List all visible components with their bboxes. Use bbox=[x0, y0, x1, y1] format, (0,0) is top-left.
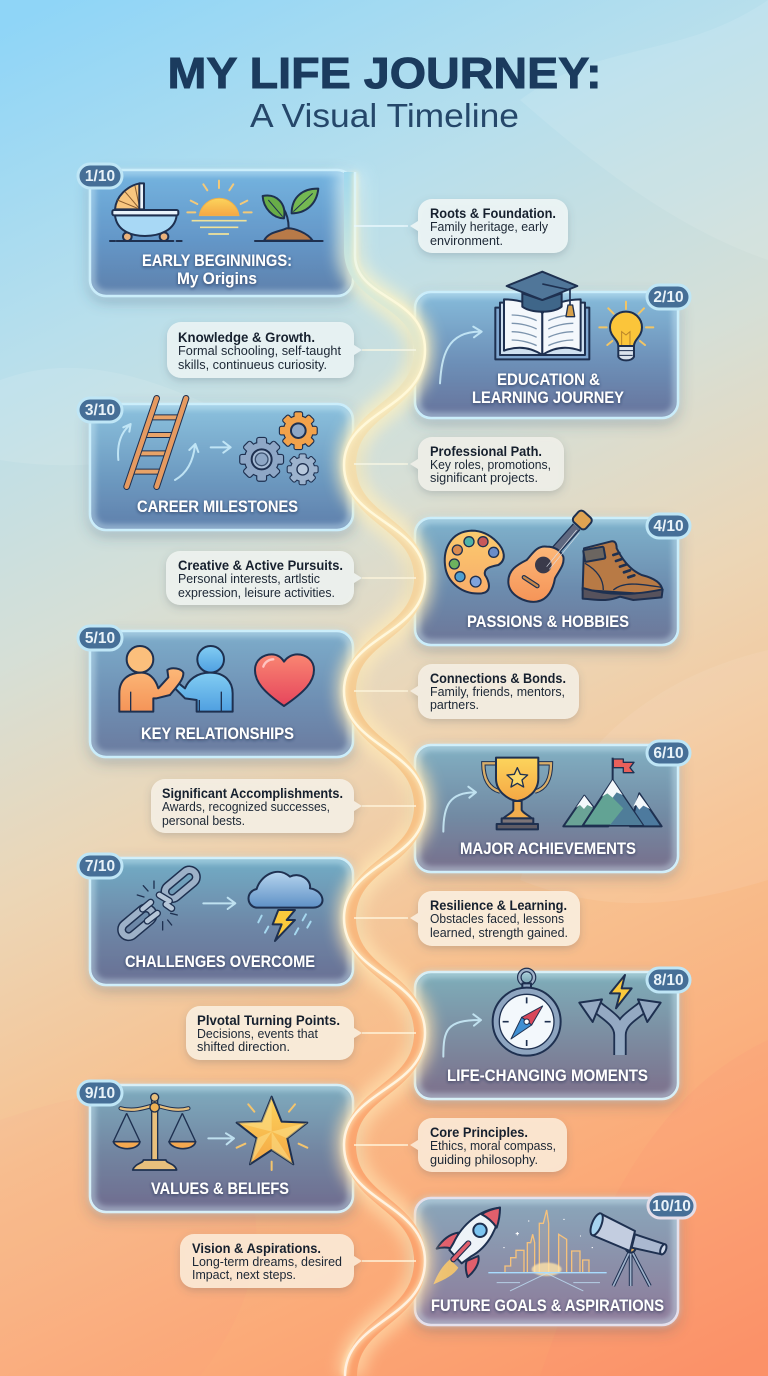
callout: significant accomplishments: Awards, recognized successes, bbox=[162, 800, 330, 814]
badge 3/10: 3/10 bbox=[85, 402, 115, 419]
callout: resilience and learning bbox=[354, 891, 580, 946]
heading: passions: PASSIONS & HOBBIES bbox=[467, 613, 629, 631]
badge 2/10 bbox=[647, 285, 690, 309]
icons: scales, star bbox=[113, 1093, 307, 1170]
callout: pivotal turning points: Plvotal Turning Points. bbox=[197, 1013, 340, 1028]
heading: education: EDUCATION & bbox=[497, 371, 600, 389]
heading: values: VALUES & BELIEFS bbox=[151, 1180, 289, 1198]
callout: professional path: significant projects. bbox=[430, 471, 538, 485]
callout: significant accomplishments: personal bests. bbox=[162, 814, 245, 828]
panel: education bbox=[415, 272, 690, 418]
callout: significant accomplishments bbox=[151, 779, 416, 833]
badge 8/10: 8/10 bbox=[653, 972, 684, 989]
title: A Visual Timeline bbox=[250, 97, 519, 134]
panel: challenges bbox=[78, 854, 353, 985]
callout: resilience and learning: Resilience & Learning. bbox=[430, 898, 567, 913]
title: MY LIFE JOURNEY: bbox=[168, 50, 602, 98]
badge 10/10 bbox=[648, 1194, 695, 1218]
heading: relationships: KEY RELATIONSHIPS bbox=[141, 725, 294, 743]
callout: core principles: Ethics, moral compass, bbox=[430, 1139, 556, 1153]
callout: vision and aspirations: Impact, next steps. bbox=[192, 1268, 296, 1282]
subheading: my origins: My Origins bbox=[177, 270, 257, 288]
panel: values bbox=[78, 1081, 353, 1212]
callout: roots and foundation: environment. bbox=[430, 234, 503, 248]
badge 4/10 bbox=[647, 514, 690, 538]
callout: resilience and learning: learned, strength gained. bbox=[430, 926, 568, 940]
panel: achievements bbox=[415, 741, 690, 872]
callout: roots and foundation: Family heritage, early bbox=[430, 220, 549, 234]
badge 5/10 bbox=[78, 626, 122, 650]
callout: knowledge and growth: skills, continueus curiosity. bbox=[178, 358, 327, 372]
heading: life-changing moments: LIFE-CHANGING MOMENTS bbox=[447, 1067, 648, 1085]
heading: achievements: MAJOR ACHIEVEMENTS bbox=[460, 840, 636, 858]
callout: core principles: Core Principles. bbox=[430, 1125, 528, 1140]
callout: connections and bonds: partners. bbox=[430, 698, 479, 712]
callout: creative and active pursuits bbox=[166, 551, 416, 605]
badge 7/10: 7/10 bbox=[85, 858, 115, 875]
callout: professional path: Key roles, promotions, bbox=[430, 458, 551, 472]
panel: early beginnings bbox=[78, 164, 353, 296]
badge 1/10 bbox=[78, 164, 122, 188]
icons: two people, heart bbox=[119, 646, 314, 712]
callout: professional path bbox=[354, 437, 564, 491]
badge 7/10 bbox=[78, 854, 122, 878]
heading: challenges: CHALLENGES OVERCOME bbox=[125, 953, 315, 971]
badge 10/10: 10/10 bbox=[652, 1198, 691, 1215]
callout: knowledge and growth: Formal schooling, self-taught bbox=[178, 344, 342, 358]
callout: connections and bonds bbox=[354, 664, 579, 719]
heading: early beginnings: EARLY BEGINNINGS: bbox=[142, 252, 292, 270]
icons: bassinet, sunrise, sprout bbox=[110, 181, 323, 241]
icons: ladder, gears bbox=[118, 398, 318, 487]
badge 9/10: 9/10 bbox=[85, 1085, 115, 1102]
callout: vision and aspirations: Vision & Aspirations. bbox=[192, 1241, 321, 1256]
badge 8/10 bbox=[647, 968, 690, 992]
panel: future goals bbox=[415, 1194, 695, 1325]
badge 6/10 bbox=[647, 741, 690, 765]
callout: knowledge and growth bbox=[167, 322, 416, 378]
callout: creative and active pursuits: Creative & Active Pursuits. bbox=[178, 558, 343, 573]
icons: compass, fork arrows bbox=[443, 970, 661, 1057]
callout: knowledge and growth: Knowledge & Growth. bbox=[178, 330, 315, 345]
callout: creative and active pursuits: expression, leisure activities. bbox=[178, 586, 335, 600]
heading: career: CAREER MILESTONES bbox=[137, 498, 298, 516]
panel: education: LEARNING JOURNEY bbox=[472, 389, 624, 407]
callout: creative and active pursuits: Personal interests, artlstic bbox=[178, 572, 320, 586]
badge 1/10: 1/10 bbox=[85, 168, 115, 185]
icons: palette, guitar, boot bbox=[445, 509, 663, 602]
icons: trophy, mountains bbox=[443, 758, 662, 832]
panel: relationships bbox=[78, 626, 353, 757]
callout: roots and foundation: Roots & Foundation. bbox=[430, 206, 556, 221]
panel: career bbox=[78, 398, 353, 530]
heading: future goals: FUTURE GOALS & ASPIRATIONS bbox=[431, 1297, 664, 1315]
badge 5/10: 5/10 bbox=[85, 630, 115, 647]
callout: vision and aspirations bbox=[180, 1234, 416, 1288]
callout: resilience and learning: Obstacles faced, lessons bbox=[430, 912, 564, 926]
icons: book, cap, bulb bbox=[440, 272, 653, 383]
callout: roots and foundation bbox=[354, 199, 568, 253]
callout: core principles bbox=[354, 1118, 567, 1172]
badge 3/10 bbox=[78, 398, 122, 422]
panel: passions bbox=[415, 509, 690, 645]
icons: broken chain, storm cloud bbox=[119, 867, 322, 941]
badge 2/10: 2/10 bbox=[653, 289, 684, 306]
callout: pivotal turning points: Decisions, events that bbox=[197, 1027, 319, 1041]
callout: significant accomplishments: Significant Accomplishments. bbox=[162, 786, 343, 801]
callout: core principles: guiding philosophy. bbox=[430, 1153, 538, 1167]
title bbox=[168, 50, 602, 134]
badge 6/10: 6/10 bbox=[653, 745, 684, 762]
badge 9/10 bbox=[78, 1081, 122, 1105]
callout: connections and bonds: Connections & Bonds. bbox=[430, 671, 566, 686]
timeline ribbon bbox=[344, 172, 425, 1376]
panel: life-changing moments bbox=[415, 968, 690, 1099]
callout: vision and aspirations: Long-term dreams, desired bbox=[192, 1255, 342, 1269]
callout: connections and bonds: Family, friends, mentors, bbox=[430, 685, 565, 699]
callout: pivotal turning points bbox=[186, 1006, 416, 1060]
callout: professional path: Professional Path. bbox=[430, 444, 542, 459]
callout: pivotal turning points: shifted direction. bbox=[197, 1040, 290, 1054]
icons: rocket, city, telescope bbox=[433, 1208, 668, 1291]
badge 4/10: 4/10 bbox=[653, 518, 684, 535]
